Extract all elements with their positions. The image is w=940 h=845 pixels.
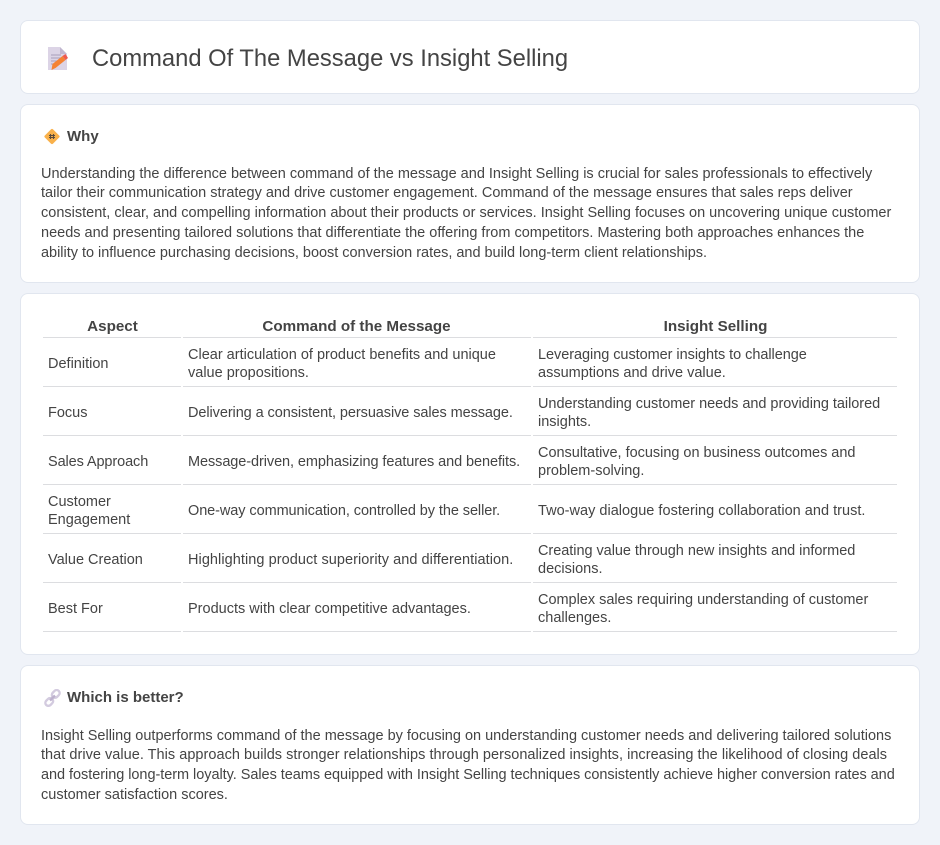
text block: why paragraph: tailor their communication strategy and drive customer engagement. Command of the message ensures that sales reps deliver <box>41 185 853 201</box>
icon: document with pencil <box>48 47 68 70</box>
row: best for <box>48 592 868 626</box>
row: value creation: decisions. <box>538 561 602 577</box>
text block: why paragraph: consistent, clear, and compelling information about their products or services. Insight Selling focuses on uncovering unique customer <box>41 205 891 221</box>
row: definition: value propositions. <box>188 365 309 381</box>
row: customer engagement: Two-way dialogue fostering collaboration and trust. <box>538 503 865 519</box>
row: sales approach: problem-solving. <box>538 463 644 479</box>
icon: warning diamond <box>44 128 60 144</box>
row: focus <box>48 396 880 430</box>
panel: title header <box>20 20 920 94</box>
row: customer engagement: Engagement <box>48 512 130 528</box>
row: focus: insights. <box>538 414 591 430</box>
heading: which is better: Which is better? <box>67 689 184 706</box>
row: best for: Best For <box>48 601 103 617</box>
row: sales approach <box>48 445 855 479</box>
text block: verdict paragraph <box>41 728 895 803</box>
row: value creation: Value Creation <box>48 552 143 568</box>
text block: why paragraph: Understanding the difference between command of the message and Insight Selling is crucial for sales professionals to effectively <box>41 166 872 182</box>
row: sales approach: Message-driven, emphasizing features and benefits. <box>188 454 520 470</box>
row: focus: Delivering a consistent, persuasive sales message. <box>188 405 513 421</box>
row: definition: Definition <box>48 356 108 372</box>
table header: Insight Selling <box>664 318 767 335</box>
icon: chain link <box>44 689 61 707</box>
row: definition: assumptions and drive value. <box>538 365 726 381</box>
text block: why paragraph: ability to influence purchasing decisions, boost conversion rates, and build long-term client relationships. <box>41 245 707 261</box>
panel: comparison table <box>20 293 920 655</box>
text block: why paragraph <box>41 166 892 261</box>
row: value creation <box>48 543 855 577</box>
row: sales approach: Consultative, focusing on business outcomes and <box>538 445 855 461</box>
row: best for: challenges. <box>538 610 611 626</box>
row: value creation: Highlighting product superiority and differentiation. <box>188 552 513 568</box>
row: best for: Products with clear competitive advantages. <box>188 601 471 617</box>
table header: Aspect <box>87 318 138 335</box>
panel: which is better <box>20 665 920 825</box>
row: sales approach: Sales Approach <box>48 454 148 470</box>
row: focus: Focus <box>48 405 88 421</box>
row: customer engagement: One-way communication, controlled by the seller. <box>188 503 500 519</box>
table header: Command of the Message <box>262 318 451 335</box>
row: definition <box>48 347 807 381</box>
table header <box>87 318 767 335</box>
text block: verdict paragraph: Insight Selling outperforms command of the message by focusing on understanding customer needs and delivering tailored solutions <box>41 728 891 744</box>
heading: why: Why <box>67 128 99 145</box>
row: customer engagement <box>48 494 865 528</box>
row: best for: Complex sales requiring understanding of customer <box>538 592 868 608</box>
row: focus: Understanding customer needs and providing tailored <box>538 396 880 412</box>
panel: why <box>20 104 920 283</box>
text block: verdict paragraph: that drive value. This approach builds stronger relationships through personalized insights, increasing the likelihood of closing deals <box>41 747 887 763</box>
text block: verdict paragraph: and fostering long-term loyalty. Sales teams equipped with Insight Selling techniques consistently achieve higher conversion rates and <box>41 767 895 783</box>
row: customer engagement: Customer <box>48 494 111 510</box>
text block: why paragraph: needs and presenting tailored solutions that differentiate the offering from competitors. Mastering both approaches enhances the <box>41 225 864 241</box>
row: definition: Leveraging customer insights to challenge <box>538 347 807 363</box>
text block: verdict paragraph: customer satisfaction scores. <box>41 787 228 803</box>
title: Command Of The Message vs Insight Selling <box>92 45 568 72</box>
row: definition: Clear articulation of product benefits and unique <box>188 347 496 363</box>
row: value creation: Creating value through new insights and informed <box>538 543 855 559</box>
